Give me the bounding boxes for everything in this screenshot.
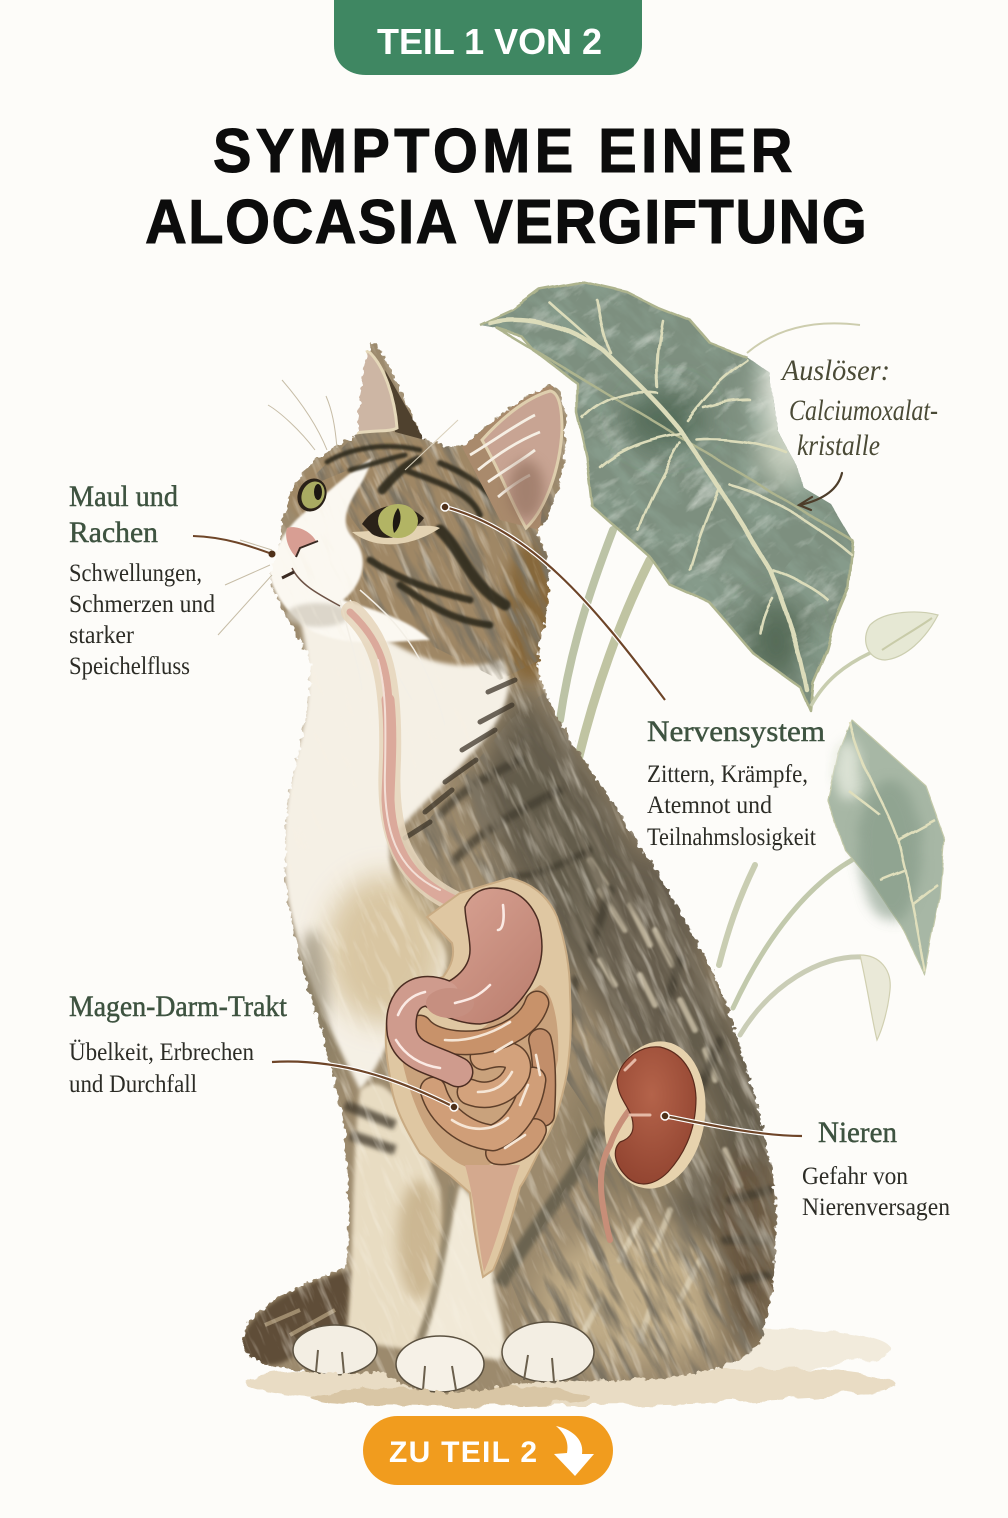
leaf veins <box>490 300 850 690</box>
tail <box>240 1270 350 1365</box>
tabby bars on foreleg <box>345 1105 395 1150</box>
ear shadow <box>508 460 544 520</box>
button: Zu Teil 2: ZU TEIL 2 <box>389 1436 537 1469</box>
white chest <box>284 620 509 1090</box>
label: Maul und Rachen: starker <box>69 622 135 649</box>
blend tube into stomach <box>426 988 474 1018</box>
plant stems behind the cat <box>560 530 862 1035</box>
right ear hair <box>470 415 540 497</box>
label: Nervensystem: Atemnot und <box>647 792 772 819</box>
label: Nieren: Nieren <box>818 1116 897 1149</box>
left foreleg <box>345 1084 441 1350</box>
pale streaks on flank <box>585 860 740 1340</box>
loop A <box>420 1003 537 1043</box>
right foreleg <box>420 1185 504 1360</box>
fur under right eye <box>352 526 440 544</box>
label: Magen-Darm-Trakt: und Durchfall <box>69 1071 197 1098</box>
cat eye left <box>292 474 332 516</box>
stomach <box>396 888 542 1072</box>
pale fur texture over cat <box>230 330 790 1400</box>
leaf pale mottling <box>483 284 845 704</box>
header tab: Teil 1 von 2: TEIL 1 VON 2 <box>377 21 602 62</box>
small curled leaf lower right <box>860 955 890 1040</box>
leg shading <box>398 1180 442 1300</box>
esophagus <box>350 612 462 905</box>
label: Nervensystem: Zittern, Krämpfe, <box>647 761 808 788</box>
label: Maul und Rachen: Maul und <box>69 480 178 513</box>
label: Nervensystem <box>647 715 825 851</box>
label: Nervensystem: Nervensystem <box>647 715 825 748</box>
leader line: Nieren <box>661 1112 802 1136</box>
paws <box>293 1325 377 1375</box>
label: Nieren <box>802 1116 950 1221</box>
leg separating shadow <box>420 1185 452 1340</box>
left ear dark back <box>385 370 425 440</box>
cat base coat <box>230 330 790 1400</box>
whiskers <box>218 380 458 725</box>
toe lines <box>316 1350 554 1390</box>
vine tendril <box>747 323 860 353</box>
label: Nieren: Gefahr von <box>802 1163 908 1190</box>
icon: curved down arrow <box>554 1426 594 1476</box>
loop D <box>433 1080 533 1138</box>
loop C <box>470 1054 518 1095</box>
dark fur texture on tabby coat <box>316 432 776 1383</box>
leaf outline <box>480 282 852 710</box>
chin shading <box>286 603 350 627</box>
handwritten note: Auslöser: kristalle <box>797 429 880 462</box>
dark streaks on back <box>440 760 770 1280</box>
stomach body <box>412 888 542 1024</box>
button: Zu Teil 2 <box>363 1416 613 1485</box>
label: Magen-Darm-Trakt: Magen-Darm-Trakt <box>69 990 288 1023</box>
label: Nieren: Nierenversagen <box>802 1194 950 1221</box>
right loops <box>497 1040 544 1153</box>
face and cheek tabby stripes <box>327 446 505 625</box>
header tab: Teil 1 von 2 <box>334 0 642 75</box>
left ear inner <box>354 350 397 433</box>
small leaf top right <box>811 612 938 706</box>
cat illustration <box>218 330 790 1400</box>
white face blaze and muzzle <box>268 458 430 642</box>
right ear inner <box>482 391 562 528</box>
label: Maul und Rachen: Schmerzen und <box>69 591 215 618</box>
tail light tips <box>264 1308 336 1337</box>
label: Nervensystem: Teilnahmslosigkeit <box>647 824 816 851</box>
grey edge of chest <box>298 926 335 1030</box>
leader line: Maul und Rachen <box>193 536 276 558</box>
lower pouch <box>402 985 558 1168</box>
ground shadow <box>245 1326 895 1407</box>
label: Maul und Rachen: Schwellungen, <box>69 560 202 587</box>
label: Maul und Rachen <box>69 480 215 680</box>
label: Magen-Darm-Trakt: Übelkeit, Erbrechen <box>69 1039 254 1066</box>
handwritten note: Auslöser: Auslöser: <box>780 354 890 387</box>
second leaf lower right <box>828 720 945 975</box>
cat nose and mouth <box>282 527 340 606</box>
highlights <box>445 1022 540 1148</box>
leader line: Nervensystem <box>441 503 665 700</box>
head tabby coat <box>285 438 545 665</box>
title: SYMPTOME EINER <box>213 116 792 185</box>
neck wash <box>506 540 554 680</box>
right ear base fur <box>462 385 553 530</box>
label: Maul und Rachen: Speichelfluss <box>69 653 190 680</box>
cat eye right <box>362 504 424 538</box>
intestines <box>420 1003 544 1153</box>
tapered end <box>465 1165 520 1272</box>
dark belly edge <box>500 1130 600 1285</box>
cat washes: back, flank, haunch, shoulder <box>290 505 781 1360</box>
arrow: Auslöser to leaf <box>799 473 842 510</box>
handwritten note: Auslöser <box>780 354 938 462</box>
title: ALOCASIA VERGIFTUNG <box>145 187 867 256</box>
label: Maul und Rachen: Rachen <box>69 516 158 549</box>
title <box>145 116 867 256</box>
cream belly wash <box>325 875 445 1025</box>
label: Magen-Darm-Trakt <box>69 990 288 1098</box>
leaf dark mottling <box>486 284 850 680</box>
neck fur boundary <box>405 680 515 838</box>
kidney <box>595 1035 715 1240</box>
pyloric tube outline <box>401 991 458 1072</box>
leader line: Magen-Darm-Trakt <box>272 1062 458 1111</box>
stomach highlights <box>396 905 504 1068</box>
handwritten note: Auslöser: Calciumoxalat- <box>789 394 938 427</box>
digestive cavity <box>386 878 571 1277</box>
pyloric tube <box>401 991 458 1072</box>
large alocasia leaf <box>470 275 870 720</box>
